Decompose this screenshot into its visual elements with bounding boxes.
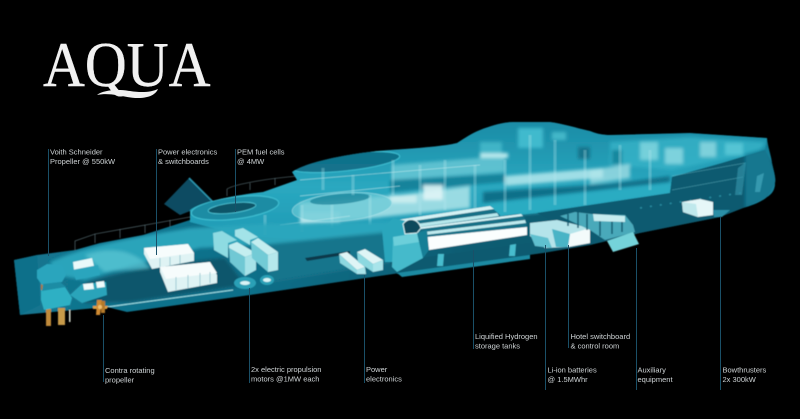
icon: power electronics and switchboards [144, 244, 217, 292]
icon: PEM fuel cells [213, 228, 278, 276]
icon: liquified hydrogen storage tanks [382, 206, 530, 277]
label: power electronics: Power [366, 365, 388, 374]
label: hotel switchboard and control room: & control room [570, 342, 619, 350]
icon: stern fin [164, 178, 216, 215]
label: PEM fuel cells: PEM fuel cells [237, 148, 285, 156]
label: Li-ion batteries: Li-ion batteries [548, 366, 597, 374]
label: contra rotating propeller: propeller [105, 376, 135, 384]
label: contra rotating propeller: Contra rotating [105, 366, 155, 375]
label: hotel switchboard and control room: Hotel switchboard [570, 332, 630, 341]
label: power electronics and switchboards: & switchboards [158, 157, 209, 166]
title: AQUA logo: AQUA [43, 31, 211, 101]
label: electric propulsion motors: 2x electric propulsion [251, 365, 321, 374]
infographic: AQUA yacht cutaway [13, 43, 776, 390]
icon: Li-ion batteries [530, 220, 590, 248]
blurred deck light patches [300, 128, 765, 226]
label: auxiliary equipment: Auxiliary [638, 366, 666, 374]
yacht cutaway illustration [14, 122, 778, 326]
vertical pillars [265, 135, 650, 235]
icon: hotel switchboard and control room [560, 212, 635, 240]
icon: power electronics cabinets [339, 249, 383, 274]
panel: superstructure [190, 122, 767, 240]
hull silhouette [14, 122, 775, 315]
label: power electronics and switchboards: Power electronics [158, 148, 217, 156]
label: electric propulsion motors: motors @1MW each [251, 374, 319, 384]
icon: Voith Schneider propeller [37, 258, 107, 326]
icon: auxiliary equipment [607, 232, 639, 252]
label: Voith Schneider propeller: Propeller @ 550kW [50, 157, 116, 166]
panel: aft hull interior [14, 222, 395, 315]
label: bowthrusters: 2x 300kW [722, 375, 757, 384]
label: Voith Schneider propeller: Voith Schneider [50, 148, 103, 156]
leader lines [48, 149, 720, 390]
label: auxiliary equipment: equipment [638, 375, 673, 384]
icon: bowthrusters [682, 199, 730, 217]
label: liquified hydrogen storage tanks: storage tanks [475, 342, 520, 350]
label: liquified hydrogen storage tanks: Liquified Hydrogen [475, 332, 538, 341]
icon: contra rotating propeller [93, 300, 108, 315]
ellipse decks [294, 150, 400, 174]
label: bowthrusters: Bowthrusters [722, 366, 767, 374]
deck railing [75, 176, 300, 250]
label: power electronics: electronics [366, 374, 402, 384]
label: Li-ion batteries: @ 1.5MWhr [548, 375, 588, 384]
icon: electric propulsion motors [234, 275, 274, 289]
panel: bow lower hull [537, 148, 778, 245]
label: PEM fuel cells: @ 4MW [237, 157, 265, 166]
